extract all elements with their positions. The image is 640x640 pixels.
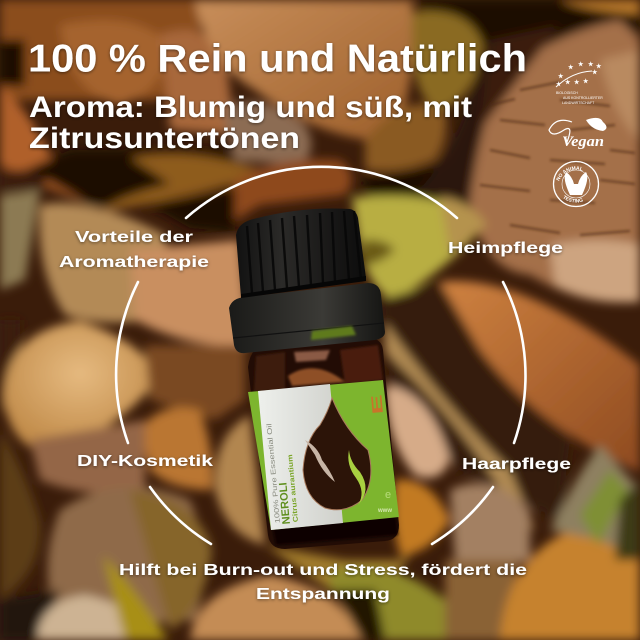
brand mark on label: e	[385, 489, 391, 501]
badge: organic EU stars: ★	[558, 73, 564, 80]
left mid	[0, 320, 20, 410]
label: Burn-out and stress benefit: Hilft bei Burn-out und Stress, fördert die	[119, 562, 527, 579]
label text: Citrus aurantium	[287, 454, 300, 522]
label: Vorteile der Aromatherapie	[59, 229, 209, 271]
brand mark on label: E	[368, 394, 387, 415]
label drop emblem	[303, 398, 371, 510]
mushroom	[470, 20, 640, 302]
badge: organic EU stars	[556, 61, 603, 105]
badge: no animal testing: NO ANIMAL	[556, 166, 582, 181]
ribbed cap	[236, 208, 366, 298]
brand mark on label	[368, 394, 392, 514]
subtitle: Zitrusuntertönen	[29, 122, 300, 155]
badge: organic EU stars: BIOLOGISCH	[556, 91, 578, 95]
label: Heimpflege: Heimpflege	[448, 240, 563, 257]
badge: no animal testing	[552, 160, 600, 208]
badge: organic EU stars: ★	[596, 63, 602, 70]
label text: 100% Pure Essential Oil	[266, 423, 282, 523]
badge: Vegan: Vegan	[562, 134, 604, 150]
green leaf	[352, 196, 485, 302]
label: Vorteile der Aromatherapie: Aromatherapie	[59, 254, 209, 271]
bottom left	[48, 487, 204, 630]
subtitle	[29, 91, 472, 155]
badge: organic EU stars: ★	[583, 78, 589, 85]
top row	[0, 0, 200, 100]
badge: organic EU stars: ★	[556, 81, 562, 88]
essential oil bottle	[229, 208, 399, 549]
badge: organic EU stars: ★	[592, 69, 598, 76]
badge: organic EU stars: LANDWIRTSCHAFT	[562, 101, 595, 105]
brand mark on label: www	[377, 508, 392, 514]
badge: organic EU stars: ★	[588, 61, 594, 68]
label: Vorteile der Aromatherapie: Vorteile der	[75, 229, 193, 246]
glass highlights	[254, 345, 398, 545]
neck collar	[229, 283, 385, 353]
subtitle: Aroma: Blumig und süß, mit	[29, 91, 472, 124]
badge: Vegan	[549, 118, 606, 150]
label: DIY-Kosmetik: DIY-Kosmetik	[77, 453, 213, 470]
middle right	[380, 280, 570, 520]
label text: NEROLI	[277, 482, 293, 525]
label text	[266, 423, 300, 525]
amber glass body	[248, 338, 399, 549]
bottle label	[248, 380, 399, 530]
label: Burn-out and stress benefit	[119, 562, 527, 603]
label: Burn-out and stress benefit: Entspannung	[256, 586, 390, 603]
circular arc segments	[116, 167, 525, 544]
bottom center and right	[190, 575, 362, 640]
badge: organic EU stars: AUS KONTROLLIERTER	[563, 96, 603, 100]
title: 100 % Rein und Natürlich	[28, 38, 527, 80]
left upper	[0, 85, 92, 205]
badge: organic EU stars: ★	[568, 64, 574, 71]
badge: organic EU stars: ★	[578, 61, 584, 68]
label: Haarpflege: Haarpflege	[462, 456, 571, 473]
badge: no animal testing: TESTING	[564, 195, 583, 203]
badge: organic EU stars: ★	[565, 79, 571, 86]
mushroom gill texture	[480, 82, 635, 235]
badge: organic EU stars: ★	[574, 79, 580, 86]
